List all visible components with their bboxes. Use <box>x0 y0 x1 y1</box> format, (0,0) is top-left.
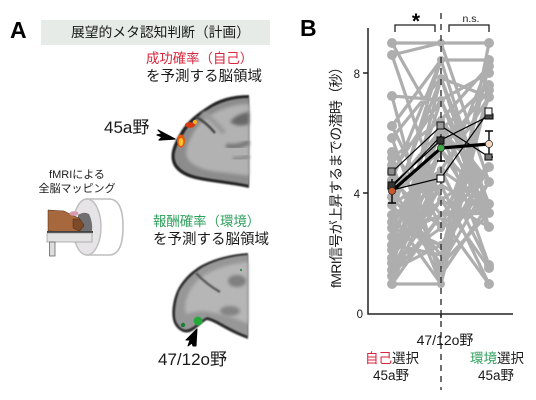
x label: 47/12o: 47/12o野 <box>417 332 473 348</box>
axis tick labels: 8 <box>354 69 360 81</box>
axis tick labels: 4 <box>354 189 361 201</box>
axes <box>363 28 513 318</box>
panel A label: A <box>10 17 27 43</box>
text: success probability: を予測する脳領域 <box>146 68 262 85</box>
arrow: 47/12o <box>186 329 197 346</box>
axis tick labels: 0 <box>357 309 363 321</box>
icon: monkey in fMRI scanner <box>47 199 123 256</box>
x label: self choice <box>365 351 419 383</box>
text: reward probability: を予測する脳領域 <box>153 231 269 248</box>
text: success probability: 成功確率（自己） <box>146 51 253 66</box>
significance: star: * <box>412 10 421 33</box>
x label: environment choice: 環境選択 <box>470 351 524 366</box>
label: area 47/12o: 47/12o野 <box>158 350 227 369</box>
text: fMRI mapping <box>38 168 116 195</box>
y axis title: fMRI信号が上昇するまでの潜時（秒） <box>328 60 344 288</box>
panel A heading <box>41 20 270 45</box>
panel B label: B <box>300 15 317 41</box>
significance: star <box>395 10 435 33</box>
text: reward probability: 報酬確率（環境） <box>153 214 260 229</box>
text: fMRI mapping: 全脳マッピング <box>38 181 116 195</box>
x label: self choice: 45a野 <box>373 368 410 383</box>
text: fMRI mapping: fMRIによる <box>49 168 105 181</box>
significance: n.s.: n.s. <box>463 13 479 25</box>
text: reward probability <box>153 214 269 248</box>
significance: n.s. <box>449 13 489 32</box>
x label: self choice: 自己選択 <box>365 351 419 366</box>
mean and example sessions <box>388 108 493 203</box>
x label: environment choice <box>470 351 524 383</box>
divider: dashed line <box>440 13 442 390</box>
chart: latency per session <box>387 38 494 289</box>
text: success probability <box>146 51 262 85</box>
x label: environment choice: 45a野 <box>478 368 515 383</box>
gray session dots <box>387 38 494 289</box>
panel A heading: 展望的メタ認知判断（計画） <box>71 24 250 40</box>
brain slice: 45a <box>171 95 249 188</box>
arrow: 45a <box>157 130 175 140</box>
brain slice: 47/12o <box>172 253 248 339</box>
axis tick labels <box>354 69 363 321</box>
label: area 45a: 45a野 <box>104 118 149 137</box>
gray session lines <box>392 43 489 284</box>
